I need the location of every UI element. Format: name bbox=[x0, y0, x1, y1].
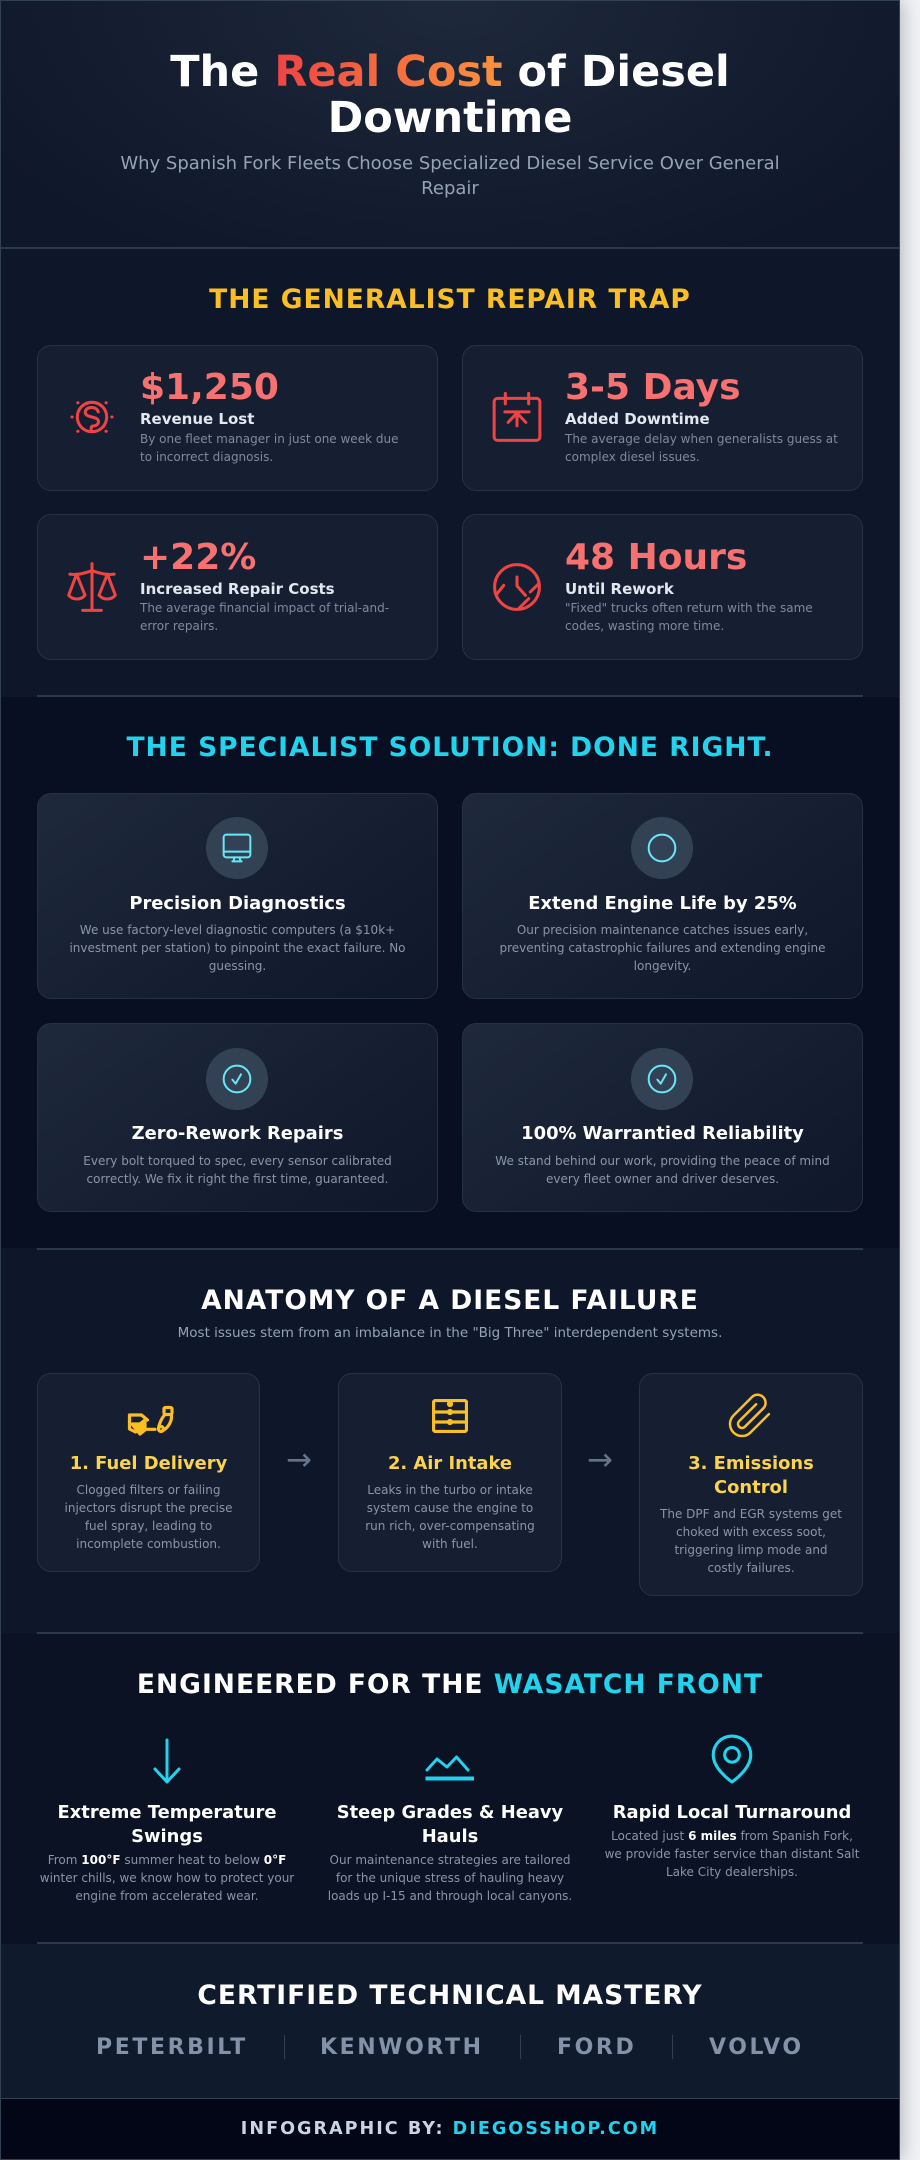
heading: wasatch front: ENGINEERED FOR THE WASATCH FRONT bbox=[137, 1669, 763, 1700]
column title: Rapid Local Turnaround bbox=[613, 1802, 851, 1823]
card text: injectors disrupt the precise bbox=[65, 1501, 232, 1515]
column text bbox=[328, 1853, 572, 1903]
card title: 100% Warrantied Reliability bbox=[521, 1123, 804, 1144]
column title: Steep Grades & Heavy bbox=[337, 1802, 563, 1823]
column text: From 100°F summer heat to below 0°F bbox=[48, 1853, 286, 1867]
column text bbox=[40, 1853, 294, 1903]
card: fuel delivery bbox=[37, 1373, 260, 1572]
subtitle: Repair bbox=[421, 178, 479, 199]
stat label: Until Rework bbox=[565, 580, 674, 598]
panel: engineered for the wasatch front bbox=[0, 1633, 900, 1944]
heading: anatomy: ANATOMY OF A DIESEL FAILURE bbox=[201, 1285, 699, 1316]
icon: scales bbox=[67, 562, 117, 612]
stat description: error repairs. bbox=[140, 619, 218, 633]
stat card: revenue lost bbox=[37, 345, 438, 491]
card text: costly failures. bbox=[707, 1561, 795, 1575]
stat value: 48 Hours bbox=[565, 537, 747, 578]
column text: Lake City dealerships. bbox=[666, 1865, 798, 1879]
card: extend engine life bbox=[462, 793, 863, 999]
icon: paperclip bbox=[728, 1394, 770, 1438]
card text: choked with excess soot, bbox=[676, 1525, 826, 1539]
icon: circle bbox=[631, 817, 693, 879]
header panel bbox=[0, 0, 900, 249]
panel: the specialist solution bbox=[0, 697, 900, 1249]
stat description: codes, wasting more time. bbox=[565, 619, 724, 633]
card title: 1. Fuel Delivery bbox=[70, 1453, 227, 1474]
card text: longevity. bbox=[634, 959, 691, 973]
stat description: to incorrect diagnosis. bbox=[140, 450, 273, 464]
icon: monitor bbox=[206, 817, 268, 879]
heading: certified mastery: CERTIFIED TECHNICAL MASTERY bbox=[197, 1980, 703, 2011]
panel: anatomy of a diesel failure bbox=[0, 1248, 900, 1633]
column title: Swings bbox=[131, 1826, 203, 1847]
card text: guessing. bbox=[209, 959, 266, 973]
card text: run rich, over-compensating bbox=[365, 1519, 535, 1533]
card title: Zero-Rework Repairs bbox=[132, 1123, 343, 1144]
card text: preventing catastrophic failures and extending engine bbox=[499, 941, 826, 955]
icon: mountains bbox=[425, 1755, 474, 1780]
stat description: The average delay when generalists guess at bbox=[565, 432, 838, 446]
arrow: fuel to air: → bbox=[286, 1442, 312, 1478]
brand: volvo: VOLVO bbox=[709, 2035, 804, 2060]
column title: Hauls bbox=[422, 1826, 478, 1847]
card text bbox=[495, 1154, 830, 1186]
icon: check circle bbox=[631, 1048, 693, 1110]
card text: We stand behind our work, providing the peace of mind bbox=[495, 1154, 830, 1168]
icon: broken clock bbox=[493, 563, 541, 611]
stat description: complex diesel issues. bbox=[565, 450, 700, 464]
footer bbox=[0, 2098, 900, 2160]
stat description bbox=[140, 432, 398, 464]
icon: calendar bbox=[492, 392, 542, 442]
stat description: By one fleet manager in just one week due bbox=[140, 432, 398, 446]
column text: Located just 6 miles from Spanish Fork, bbox=[611, 1829, 853, 1843]
heading: specialist solution: THE SPECIALIST SOLUTION: DONE RIGHT. bbox=[126, 732, 774, 763]
stat description: "Fixed" trucks often return with the same bbox=[565, 601, 813, 615]
subtitle bbox=[120, 153, 780, 199]
card title bbox=[688, 1453, 814, 1498]
title: The Real Cost of Diesel bbox=[170, 47, 730, 97]
card title: 2. Air Intake bbox=[388, 1453, 512, 1474]
brand: kenworth: KENWORTH bbox=[320, 2035, 484, 2060]
column text: Our maintenance strategies are tailored bbox=[330, 1853, 570, 1867]
panel: the generalist repair trap bbox=[0, 249, 900, 697]
card text bbox=[69, 923, 406, 973]
subtitle: Why Spanish Fork Fleets Choose Specialized Diesel Service Over General bbox=[120, 153, 780, 174]
stat label: Increased Repair Costs bbox=[140, 580, 335, 598]
column text: we provide faster service than distant Salt bbox=[605, 1847, 859, 1861]
card text: incomplete combustion. bbox=[76, 1537, 221, 1551]
stat card: added downtime bbox=[462, 345, 863, 491]
icon: fuel injector bbox=[128, 1406, 174, 1436]
column: temperature swings bbox=[40, 1738, 294, 1903]
card text bbox=[499, 923, 826, 973]
stat value: $1,250 bbox=[140, 367, 279, 408]
stat value: +22% bbox=[140, 537, 256, 578]
card text: We use factory-level diagnostic computers (a $10k+ bbox=[80, 923, 395, 937]
stat description: The average financial impact of trial-and- bbox=[140, 601, 389, 615]
stat label: Revenue Lost bbox=[140, 410, 254, 428]
card title: Precision Diagnostics bbox=[129, 893, 346, 914]
column text: loads up I-15 and through local canyons. bbox=[328, 1889, 572, 1903]
card title: 3. Emissions bbox=[688, 1453, 814, 1474]
card text: fuel spray, leading to bbox=[85, 1519, 212, 1533]
column title: Extreme Temperature bbox=[58, 1802, 276, 1823]
brand: peterbilt: PETERBILT bbox=[96, 2035, 248, 2060]
card text bbox=[660, 1507, 842, 1575]
icon: air intake grid bbox=[432, 1399, 468, 1433]
column text: for the unique stress of hauling heavy bbox=[336, 1871, 564, 1885]
arrow: air to emissions: → bbox=[587, 1442, 613, 1478]
card text: Leaks in the turbo or intake bbox=[367, 1483, 533, 1497]
section subtitle: Most issues stem from an imbalance in the "Big Three" interdependent systems. bbox=[178, 1325, 722, 1341]
card: precision diagnostics bbox=[37, 793, 438, 999]
card title: Extend Engine Life by 25% bbox=[528, 893, 797, 914]
card text: The DPF and EGR systems get bbox=[660, 1507, 842, 1521]
card text: Every bolt torqued to spec, every sensor calibrated bbox=[83, 1154, 392, 1168]
card title: Control bbox=[714, 1477, 788, 1498]
column text: engine from accelerated wear. bbox=[75, 1889, 259, 1903]
card text bbox=[65, 1483, 232, 1551]
card text: Clogged filters or failing bbox=[76, 1483, 220, 1497]
card: emissions control bbox=[639, 1373, 863, 1596]
column: steep grades bbox=[328, 1755, 572, 1903]
column text bbox=[605, 1829, 860, 1879]
card text bbox=[365, 1483, 535, 1551]
card text: triggering limp mode and bbox=[674, 1543, 828, 1557]
icon: check circle bbox=[206, 1048, 268, 1110]
card text: correctly. We fix it right the first time, guaranteed. bbox=[87, 1172, 388, 1186]
card text bbox=[83, 1154, 392, 1186]
stat description bbox=[564, 432, 838, 464]
card text: investment per station) to pinpoint the exact failure. No bbox=[69, 941, 406, 955]
icon: down arrow bbox=[153, 1738, 181, 1784]
stat label: Added Downtime bbox=[565, 410, 710, 428]
column title bbox=[337, 1802, 563, 1847]
stat description bbox=[140, 601, 389, 633]
stat card: until rework bbox=[462, 514, 863, 660]
footer credit: INFOGRAPHIC BY: DIEGOSSHOP.COM bbox=[241, 2119, 659, 2139]
stat card: repair costs bbox=[37, 514, 438, 660]
column title bbox=[58, 1802, 276, 1847]
column text: winter chills, we know how to protect your bbox=[40, 1871, 294, 1885]
icon: dollar gear bbox=[70, 400, 114, 434]
title bbox=[170, 47, 730, 143]
card: warrantied reliability bbox=[462, 1023, 863, 1212]
heading: generalist trap: THE GENERALIST REPAIR TRAP bbox=[209, 284, 691, 315]
brand: ford: FORD bbox=[557, 2035, 636, 2060]
card text: Our precision maintenance catches issues early, bbox=[517, 923, 808, 937]
card: air intake bbox=[338, 1373, 562, 1572]
title: Downtime bbox=[328, 93, 572, 143]
card text: with fuel. bbox=[422, 1537, 478, 1551]
card text: system cause the engine to bbox=[367, 1501, 533, 1515]
stat description bbox=[565, 601, 813, 633]
panel: certified technical mastery bbox=[0, 1944, 900, 2098]
icon: map pin bbox=[712, 1734, 752, 1784]
card text: every fleet owner and driver deserves. bbox=[546, 1172, 779, 1186]
card: zero-rework repairs bbox=[37, 1023, 438, 1212]
stat value: 3-5 Days bbox=[565, 367, 741, 408]
column: rapid turnaround bbox=[605, 1734, 860, 1879]
